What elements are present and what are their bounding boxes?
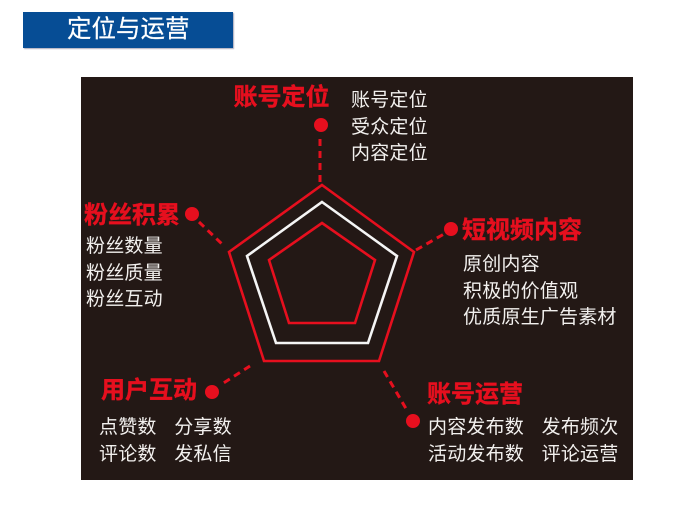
- panel: dark background: [81, 77, 633, 480]
- list: 账号运营 items: 内容发布数 发布频次 活动发布数 评论运营: [428, 417, 618, 464]
- heading: 粉丝积累: 粉丝积累: [84, 202, 180, 229]
- heading: 账号定位: 账号定位: [234, 84, 330, 111]
- heading: 用户互动: 用户互动: [101, 377, 197, 404]
- connector: top: [314, 118, 328, 183]
- connector: lower left: [205, 366, 250, 399]
- middle white pentagon: [247, 202, 397, 343]
- heading: 账号运营: 账号运营: [427, 381, 523, 408]
- outer red pentagon: [229, 185, 414, 361]
- list: 账号定位 items: 账号定位 受众定位 内容定位: [351, 90, 428, 164]
- title text: 定位与运营: [67, 16, 190, 43]
- connector: lower right: [384, 371, 420, 428]
- inner red pentagon: [269, 223, 375, 323]
- connector: left: [185, 207, 222, 244]
- title banner: [23, 12, 233, 48]
- connector: right: [416, 222, 458, 250]
- heading: 短视频内容: 短视频内容: [462, 217, 582, 244]
- list: 用户互动 items: 点赞数 分享数 评论数 发私信: [99, 417, 232, 464]
- list: 短视频内容 items: 原创内容 积极的价值观 优质原生广告素材: [463, 254, 617, 328]
- list: 粉丝积累 items: 粉丝数量 粉丝质量 粉丝互动: [86, 236, 163, 310]
